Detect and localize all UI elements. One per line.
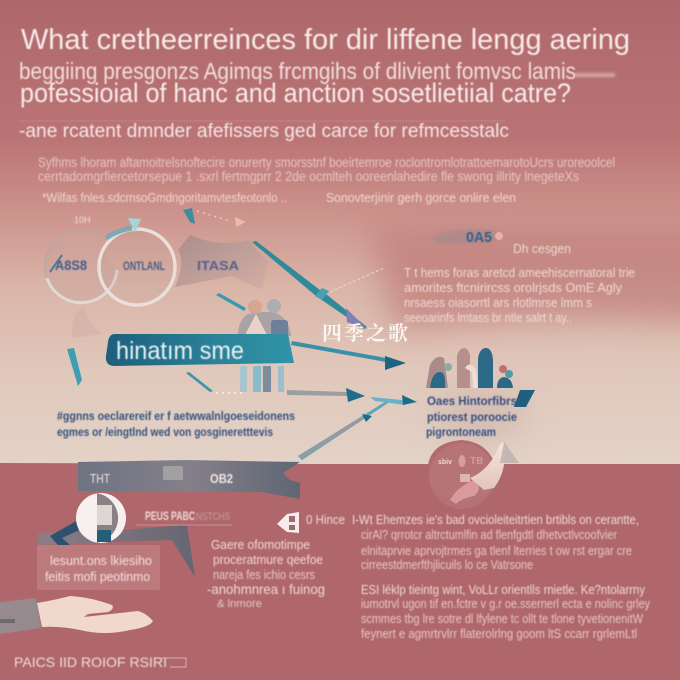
background lower band: [0, 463, 680, 680]
left caption: #ggnns oeclarereif er f aetwwalnlgoeseidonens: [57, 409, 295, 423]
centre bullet text: proceratmure qeefoe: [213, 552, 323, 567]
pink caption box: [37, 545, 160, 590]
teal banner: [106, 334, 294, 366]
rising blue arrow: [298, 395, 417, 460]
chip caption: Dh cesgen: [513, 241, 571, 256]
title smear: [575, 73, 615, 77]
pink caption box: feitis mofi peotinmo: [45, 569, 150, 584]
centre bullet text: nareja fes ichio cesrs: [213, 567, 315, 582]
intro text: cerrtadomgrfiercetorsepue 1 .sxrl fertmgprr 2 2de ocmlteh ooreenlahedire fle swong illrity lnegeteXs: [38, 169, 579, 184]
subheading: -ane rcatent dmnder afefissers ged carce for refmcesstalc: [19, 121, 509, 142]
right body text: T t hems foras aretcd ameehiscernatoral trie: [404, 265, 635, 280]
chip top right: 0A5: [466, 229, 492, 246]
intro text: Sonovterjinir gerh gorce onlire elen: [326, 190, 516, 205]
centre bullet text: -anohmnrea ı fuinog: [207, 581, 325, 597]
soft shadow behind centre card: [434, 389, 526, 441]
short lower arrow: [186, 372, 244, 393]
centre bullet text: & lnmore: [217, 598, 262, 610]
left caption: egmes or /eingtlnd wed von gosgineretttevis: [57, 425, 273, 439]
circular bottle icon: [76, 493, 126, 543]
title: What cretheerreinces for dir liffene lengg aering: [21, 24, 630, 56]
teal arrow to right: [252, 241, 367, 329]
circular medical illustration: sbiv: [438, 459, 452, 466]
venn diagram: A8S8: [55, 257, 87, 273]
grey connector band: [38, 525, 195, 577]
pink caption box: lesunt.ons lkiesiho: [50, 553, 152, 568]
teal arrow centre: [291, 341, 406, 370]
centre card caption: Oaes Hintorfibrs: [427, 394, 517, 408]
centre card caption: [426, 394, 517, 439]
dashed leader: [330, 268, 384, 292]
icon: open hand: [0, 596, 153, 634]
icon: buildings and people: [426, 348, 513, 388]
ribbon label: [136, 509, 232, 525]
dark arrow behind circle: [50, 520, 84, 545]
right text block two: ESI léklp tieintg wint, VoLLr orientlls rnietle. Ke?ntolarrny: [361, 582, 645, 597]
watermark: 四季之歌: [322, 317, 408, 346]
footer label: PAICS IID ROIOF RSIRI: [14, 654, 167, 670]
centre card caption: ptiorest poroocie: [427, 410, 517, 424]
grey header ribbon: [78, 460, 300, 499]
venn diagram: 10H: [74, 215, 91, 225]
short teal arrow: [216, 293, 246, 311]
pale curved arrow: [72, 306, 103, 338]
right body text: [404, 265, 635, 325]
left caption: [57, 409, 295, 439]
top accent arrow: [183, 208, 246, 227]
centre bullet text: [207, 537, 325, 610]
rose panel behind right text: [370, 225, 680, 330]
venn diagram: [45, 215, 175, 305]
people illustration: [238, 299, 291, 392]
right text block two: feynert e agmrtrvlrr flaterolrlng goom ltS ccarr rgrlemLtl: [361, 626, 637, 641]
left teal arrow: [67, 348, 82, 386]
title third line: pofessioial of hanc and anction sosetlietiial catre?: [20, 78, 571, 108]
grey header ribbon: THT: [90, 471, 110, 486]
background upper gradient: [0, 0, 680, 464]
circular medical illustration: [428, 440, 519, 509]
right text block one: 0 Hince: [306, 512, 345, 527]
right text block two: [361, 582, 650, 641]
chip top right: [433, 229, 503, 246]
right text block one: [306, 512, 639, 572]
right text block one: cirreestdmerfthjlicuils lo ce Vatrsone: [361, 557, 533, 572]
ribbon label: PEUS PABC: [145, 509, 195, 523]
grey arrow shape with label: ITASA: [197, 258, 240, 273]
grey arrow shape with label: [175, 235, 268, 290]
centre bullet text: Gaere ofomotimpe: [211, 537, 310, 552]
venn diagram: ONTLANL: [123, 259, 165, 273]
grey arrow: [287, 388, 365, 402]
right body text: nrsaess oiasorrtl ars rlotlmrse lmm s: [404, 295, 592, 310]
icon: phone: [514, 390, 535, 407]
right body text: seeoarinfs lmtass br ntle salrt t ay..: [404, 310, 572, 325]
title second line: beggiing presgonzs Agimqs frcmgihs of dlivient fomvsc lamis: [19, 58, 576, 84]
teal banner: hinatım sme: [116, 337, 244, 365]
grey header ribbon: OB2: [210, 471, 233, 486]
right text block one: I-Wt Ehemzes ie's bad ovcioleiteitrtien brtibls on cerantte,: [352, 512, 639, 527]
ribbon label: NSTCHS: [196, 511, 230, 523]
intro text: *Wilfas fnles.sdcrnsoGmdngoritamvtesfeotonlo ..: [42, 190, 287, 205]
intro text: [38, 155, 615, 205]
centre card caption: pigrontoneam: [426, 425, 496, 439]
icon: document shield: [277, 512, 299, 533]
circular medical illustration: TB: [470, 456, 483, 467]
right text block one: elnitaprvie aprvojtrmes ga tlenf lterries t ow rst ergar cre: [361, 543, 632, 558]
right text block one: cirAl? qrrotcr altrctumlfin ad flenfgdtl dhetvctlvcoofvier: [361, 527, 618, 542]
right body text: amorites ftcnirircss orolrjsds OmE Agly: [404, 280, 622, 295]
title: [19, 24, 630, 108]
